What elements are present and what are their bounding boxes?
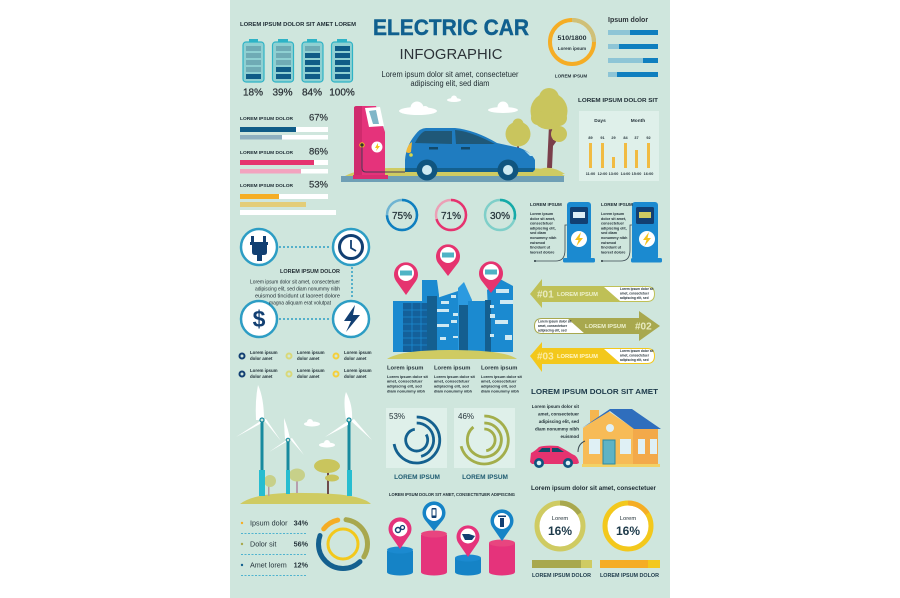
- panel: days and month chart: Days: [594, 118, 606, 124]
- bar group 86%: 86%: [309, 146, 329, 158]
- bar group 67%: [240, 112, 329, 140]
- station text right: [601, 202, 633, 254]
- radial chart labels: LOREM IPSUM: [462, 474, 508, 481]
- battery percentages: 84%: [302, 88, 322, 98]
- panel: battery levels: LOREM IPSUM DOLOR SIT AMET LOREM: [240, 22, 357, 28]
- panel: battery levels: [240, 22, 357, 98]
- pin right: [479, 261, 503, 293]
- text columns under city: Lorem ipsum dolor sit: [481, 374, 523, 379]
- tree large: [530, 88, 568, 174]
- donut: wind share: [318, 520, 368, 568]
- legend: dots: Lorem ipsum: [344, 350, 372, 355]
- bar group 86%: [240, 146, 329, 174]
- battery percentages: 39%: [272, 88, 293, 98]
- legend: dots: [240, 350, 372, 379]
- text block: amet, consectetuer: [538, 412, 579, 416]
- radial chart labels: LOREM IPSUM: [394, 474, 440, 481]
- donut yellow: 16%: [616, 524, 640, 538]
- icon: dollar: $: [253, 306, 266, 332]
- ring 75%: 75%: [392, 211, 412, 222]
- station text left: adipiscing elit,: [530, 226, 556, 230]
- car: [405, 128, 535, 180]
- ring: 510/1800 counter: 510/1800: [558, 35, 587, 42]
- legend: wind share: 34%: [294, 518, 309, 528]
- battery percentages: 18%: [243, 88, 263, 98]
- battery 84%: [302, 39, 323, 82]
- station text left: LOREM IPSUM: [530, 202, 562, 207]
- ring 30%: 30%: [490, 211, 510, 222]
- station text left: consectetuer: [530, 222, 554, 226]
- text columns under city: diam nonummy nibh: [481, 388, 520, 394]
- battery 39%: [272, 39, 294, 82]
- legend: dots: Lorem ipsum: [344, 368, 372, 373]
- pin gears: [388, 517, 412, 549]
- icon: lightning bolt: [333, 301, 369, 337]
- arrow #01: #01: [537, 290, 554, 300]
- panel: days and month chart: LOREM IPSUM DOLOR SIT: [578, 98, 658, 104]
- panel: home charging: [530, 387, 661, 468]
- hill: [240, 493, 371, 504]
- battery 100%: [332, 39, 352, 82]
- text block: lorem ipsum dolor: euismod tincidunt ut laoreet dolore: [255, 294, 340, 300]
- legend: dots: Lorem ipsum: [297, 350, 325, 355]
- station text right: Lorem ipsum: [601, 212, 625, 216]
- icon: small car: [530, 441, 585, 468]
- arrow #02: #02: [635, 322, 652, 332]
- bar group 53%: LOREM IPSUM DOLOR: [240, 183, 294, 189]
- text block: lorem ipsum dolor: [250, 269, 340, 306]
- illustration: city with pins: [387, 244, 517, 359]
- value labels: 92: [646, 136, 651, 140]
- arrow #01: amet, consectetuer: [620, 292, 650, 296]
- cylinder 4: [489, 540, 515, 576]
- panel: days and month chart: [578, 98, 659, 181]
- station text left: dolor sit amet,: [530, 217, 555, 221]
- station text left: Lorem ipsum: [530, 212, 554, 216]
- legend: dots: dolor amet: [344, 374, 367, 379]
- panel: radial chart 53%: [386, 408, 447, 468]
- bar group 67%: LOREM IPSUM DOLOR: [240, 116, 294, 122]
- text columns under city: [387, 366, 523, 394]
- text columns under city: amet, consectetuer: [434, 378, 470, 384]
- pin left: [394, 262, 418, 295]
- pin phone: [423, 501, 446, 531]
- arrow #01: [530, 279, 655, 308]
- intro text: [382, 70, 519, 88]
- bar group 86%: LOREM IPSUM DOLOR: [240, 150, 294, 156]
- station text left: nonummy nibh: [530, 236, 557, 240]
- cylinder 3: [455, 554, 481, 576]
- tree small: [506, 118, 530, 148]
- bar group 67%: 67%: [309, 112, 329, 124]
- text columns under city: amet, consectetuer: [481, 378, 517, 384]
- panel: cylinders with pins: [387, 492, 516, 576]
- arrow #02: adipiscing elit, sed: [538, 328, 567, 332]
- value labels: 11:00: [586, 172, 595, 176]
- station text right: consectetuer: [601, 222, 625, 226]
- legend: dots: Lorem ipsum: [250, 350, 278, 355]
- arrow #03: amet, consectetuer: [620, 354, 650, 358]
- panel: radial chart 53%: 53%: [389, 412, 405, 421]
- tree trio: [264, 459, 340, 496]
- intro text: adipiscing elit, sed diam: [410, 79, 490, 88]
- text block: [532, 404, 579, 439]
- text block: lorem ipsum dolor: adipiscing elit, sed diam nonummy nibh: [255, 286, 340, 292]
- station text right: euismod: [601, 241, 617, 245]
- ground: [387, 350, 517, 359]
- value labels: 91: [600, 136, 605, 140]
- turbine left: [236, 385, 281, 496]
- bar olive: LOREM IPSUM DOLOR: [532, 573, 591, 579]
- turbine right: [325, 392, 372, 496]
- pin centre: [436, 244, 460, 276]
- value labels: 15:00: [632, 172, 641, 176]
- text block: lorem ipsum dolor: magna aliquam erat volutpat: [269, 300, 332, 306]
- title: ELECTRIC CAR: [373, 15, 529, 40]
- buildings: [393, 279, 513, 352]
- ring: 510/1800 counter: [550, 20, 594, 78]
- ring: 510/1800 counter: LOREM IPSUM: [555, 74, 587, 78]
- panel: radial chart 46%: 46%: [458, 412, 474, 421]
- legend: wind share: [241, 518, 309, 576]
- text columns under city: adipiscing elit, sed: [481, 384, 516, 388]
- value labels: 12:00: [598, 172, 607, 176]
- station text left: [530, 202, 562, 254]
- text columns under city: diam nonummy nibh: [434, 388, 473, 394]
- arrow #03: [530, 342, 655, 372]
- station left: [534, 202, 595, 262]
- title: [373, 15, 529, 63]
- battery percentages: 100%: [329, 88, 355, 98]
- text columns under city: Lorem ipsum dolor sit: [387, 374, 429, 379]
- text block: euismod: [560, 434, 579, 439]
- station text right: sed diam: [601, 231, 618, 235]
- panel: ipsum dolor bars: [608, 17, 658, 77]
- illustration: wind turbines: [236, 385, 372, 504]
- legend: dots: Lorem ipsum: [297, 368, 325, 373]
- station text right: dolor sit amet,: [601, 217, 626, 221]
- panel: ipsum dolor bars: Ipsum dolor: [608, 17, 648, 24]
- station text right: laoreet dolore: [601, 250, 625, 254]
- text columns under city: Lorem ipsum: [481, 366, 517, 372]
- donut olive: [537, 503, 583, 549]
- value labels: 16:00: [644, 172, 653, 176]
- diagram: cost and time connectors: [241, 229, 369, 337]
- icon: clock: [333, 229, 369, 265]
- text columns under city: adipiscing elit, sed: [434, 384, 469, 388]
- text block: lorem ipsum dolor: Lorem ipsum dolor sit amet, consectetuer: [250, 280, 340, 286]
- icon: house: [582, 409, 661, 467]
- cylinder 2: [421, 530, 447, 576]
- station text left: sed diam: [530, 231, 547, 235]
- donut yellow: Lorem: [620, 516, 636, 522]
- radial chart labels: [394, 474, 508, 481]
- bar group 53%: [240, 180, 336, 215]
- text columns under city: Lorem ipsum: [434, 366, 470, 372]
- station text left: tincidunt ut: [530, 246, 551, 250]
- bar yellow: LOREM IPSUM DOLOR: [600, 573, 659, 579]
- value labels: 29: [611, 136, 616, 140]
- turbine middle: [269, 418, 304, 494]
- text block: Lorem ipsum dolor sit: [532, 404, 579, 409]
- arrow #03: adipiscing elit, sed: [620, 358, 649, 362]
- battery percentages: [243, 88, 355, 98]
- value labels: 84: [623, 136, 628, 140]
- charging station: [353, 106, 405, 179]
- arrow #03: #03: [537, 352, 554, 362]
- value labels: [586, 136, 653, 176]
- legend: dots: dolor amet: [297, 356, 320, 361]
- battery 18%: [243, 39, 264, 82]
- text block: lorem ipsum dolor: LOREM IPSUM DOLOR: [280, 269, 340, 275]
- text columns under city: amet, consectetuer: [387, 378, 423, 384]
- panel: radial chart 46%: [454, 408, 515, 468]
- station text right: LOREM IPSUM: [601, 202, 633, 207]
- arrow #01: adipiscing elit, sed: [620, 296, 649, 300]
- panel: percent donuts: Lorem ipsum dolor sit amet, consectetuer: [531, 485, 657, 492]
- intro text: Lorem ipsum dolor sit amet, consectetuer: [382, 70, 519, 79]
- ring 71%: 71%: [441, 211, 461, 222]
- arrow #01: LOREM IPSUM: [557, 292, 598, 298]
- pin charger: [490, 509, 514, 541]
- legend: wind share: Ipsum dolor: [250, 518, 288, 528]
- arrow #01: Lorem ipsum dolor sit: [620, 287, 654, 291]
- donut olive: Lorem: [552, 516, 568, 522]
- donut olive: 16%: [548, 524, 572, 538]
- clouds: [399, 96, 518, 115]
- legend: wind share: Amet lorem: [250, 560, 287, 570]
- panel: progress bars: [240, 112, 336, 215]
- value labels: 14:00: [621, 172, 630, 176]
- station text right: nonummy nibh: [601, 236, 628, 240]
- cylinder 1: [387, 546, 413, 576]
- donut yellow: [605, 503, 651, 549]
- legend: dots: Lorem ipsum: [250, 368, 278, 373]
- text columns under city: diam nonummy nibh: [387, 388, 426, 394]
- value labels: 37: [634, 136, 639, 140]
- panel: charging stations: [530, 202, 662, 262]
- station text right: tincidunt ut: [601, 246, 622, 250]
- arrow #02: LOREM IPSUM: [585, 324, 626, 330]
- clouds: [304, 419, 335, 448]
- text columns under city: adipiscing elit, sed: [387, 384, 422, 388]
- legend: dots: dolor amet: [344, 356, 367, 361]
- arrow #02: Lorem ipsum dolor sit: [538, 320, 572, 324]
- legend: wind share: 12%: [294, 560, 309, 570]
- arrow #02: amet, consectetuer: [538, 324, 568, 328]
- legend: wind share: Dolor sit: [250, 540, 276, 548]
- panel: days and month chart: Month: [631, 118, 645, 124]
- text block: diam nonummy nibh: [535, 426, 579, 432]
- station right: [601, 202, 662, 262]
- percent rings: [387, 200, 515, 230]
- value labels: 89: [588, 136, 593, 140]
- ring: 510/1800 counter: Lorem ipsum: [558, 46, 586, 51]
- text columns under city: Lorem ipsum dolor sit: [434, 374, 476, 379]
- title: INFOGRAPHIC: [400, 46, 503, 63]
- legend: wind share: 56%: [294, 540, 309, 548]
- arrow #03: LOREM IPSUM: [557, 354, 598, 360]
- station text left: laoreet dolore: [530, 250, 554, 254]
- text columns under city: Lorem ipsum: [387, 366, 423, 372]
- ground: [341, 168, 565, 182]
- station text left: euismod: [530, 241, 546, 245]
- value labels: 13:00: [609, 172, 618, 176]
- illustration: electric car charging: [341, 88, 568, 182]
- legend: dots: dolor amet: [250, 374, 273, 379]
- icon: plug: [241, 229, 277, 265]
- arrow #03: Lorem ipsum dolor sit: [620, 349, 654, 353]
- bars: [589, 143, 650, 168]
- panel: home charging: LOREM IPSUM DOLOR SIT AMET: [531, 387, 658, 396]
- pin hand: [456, 525, 479, 557]
- text block: adipiscing elit, sed: [539, 419, 579, 424]
- panel: percent donuts: [531, 485, 660, 579]
- legend: dots: dolor amet: [297, 374, 320, 379]
- bar group 53%: 53%: [309, 180, 329, 190]
- legend: dots: dolor amet: [250, 356, 273, 361]
- station text right: adipiscing elit,: [601, 226, 627, 230]
- arrow #02: [534, 311, 660, 341]
- panel: cylinders with pins: LOREM IPSUM DOLOR SIT AMET, CONSECTETUER ADIPISCING: [389, 492, 516, 497]
